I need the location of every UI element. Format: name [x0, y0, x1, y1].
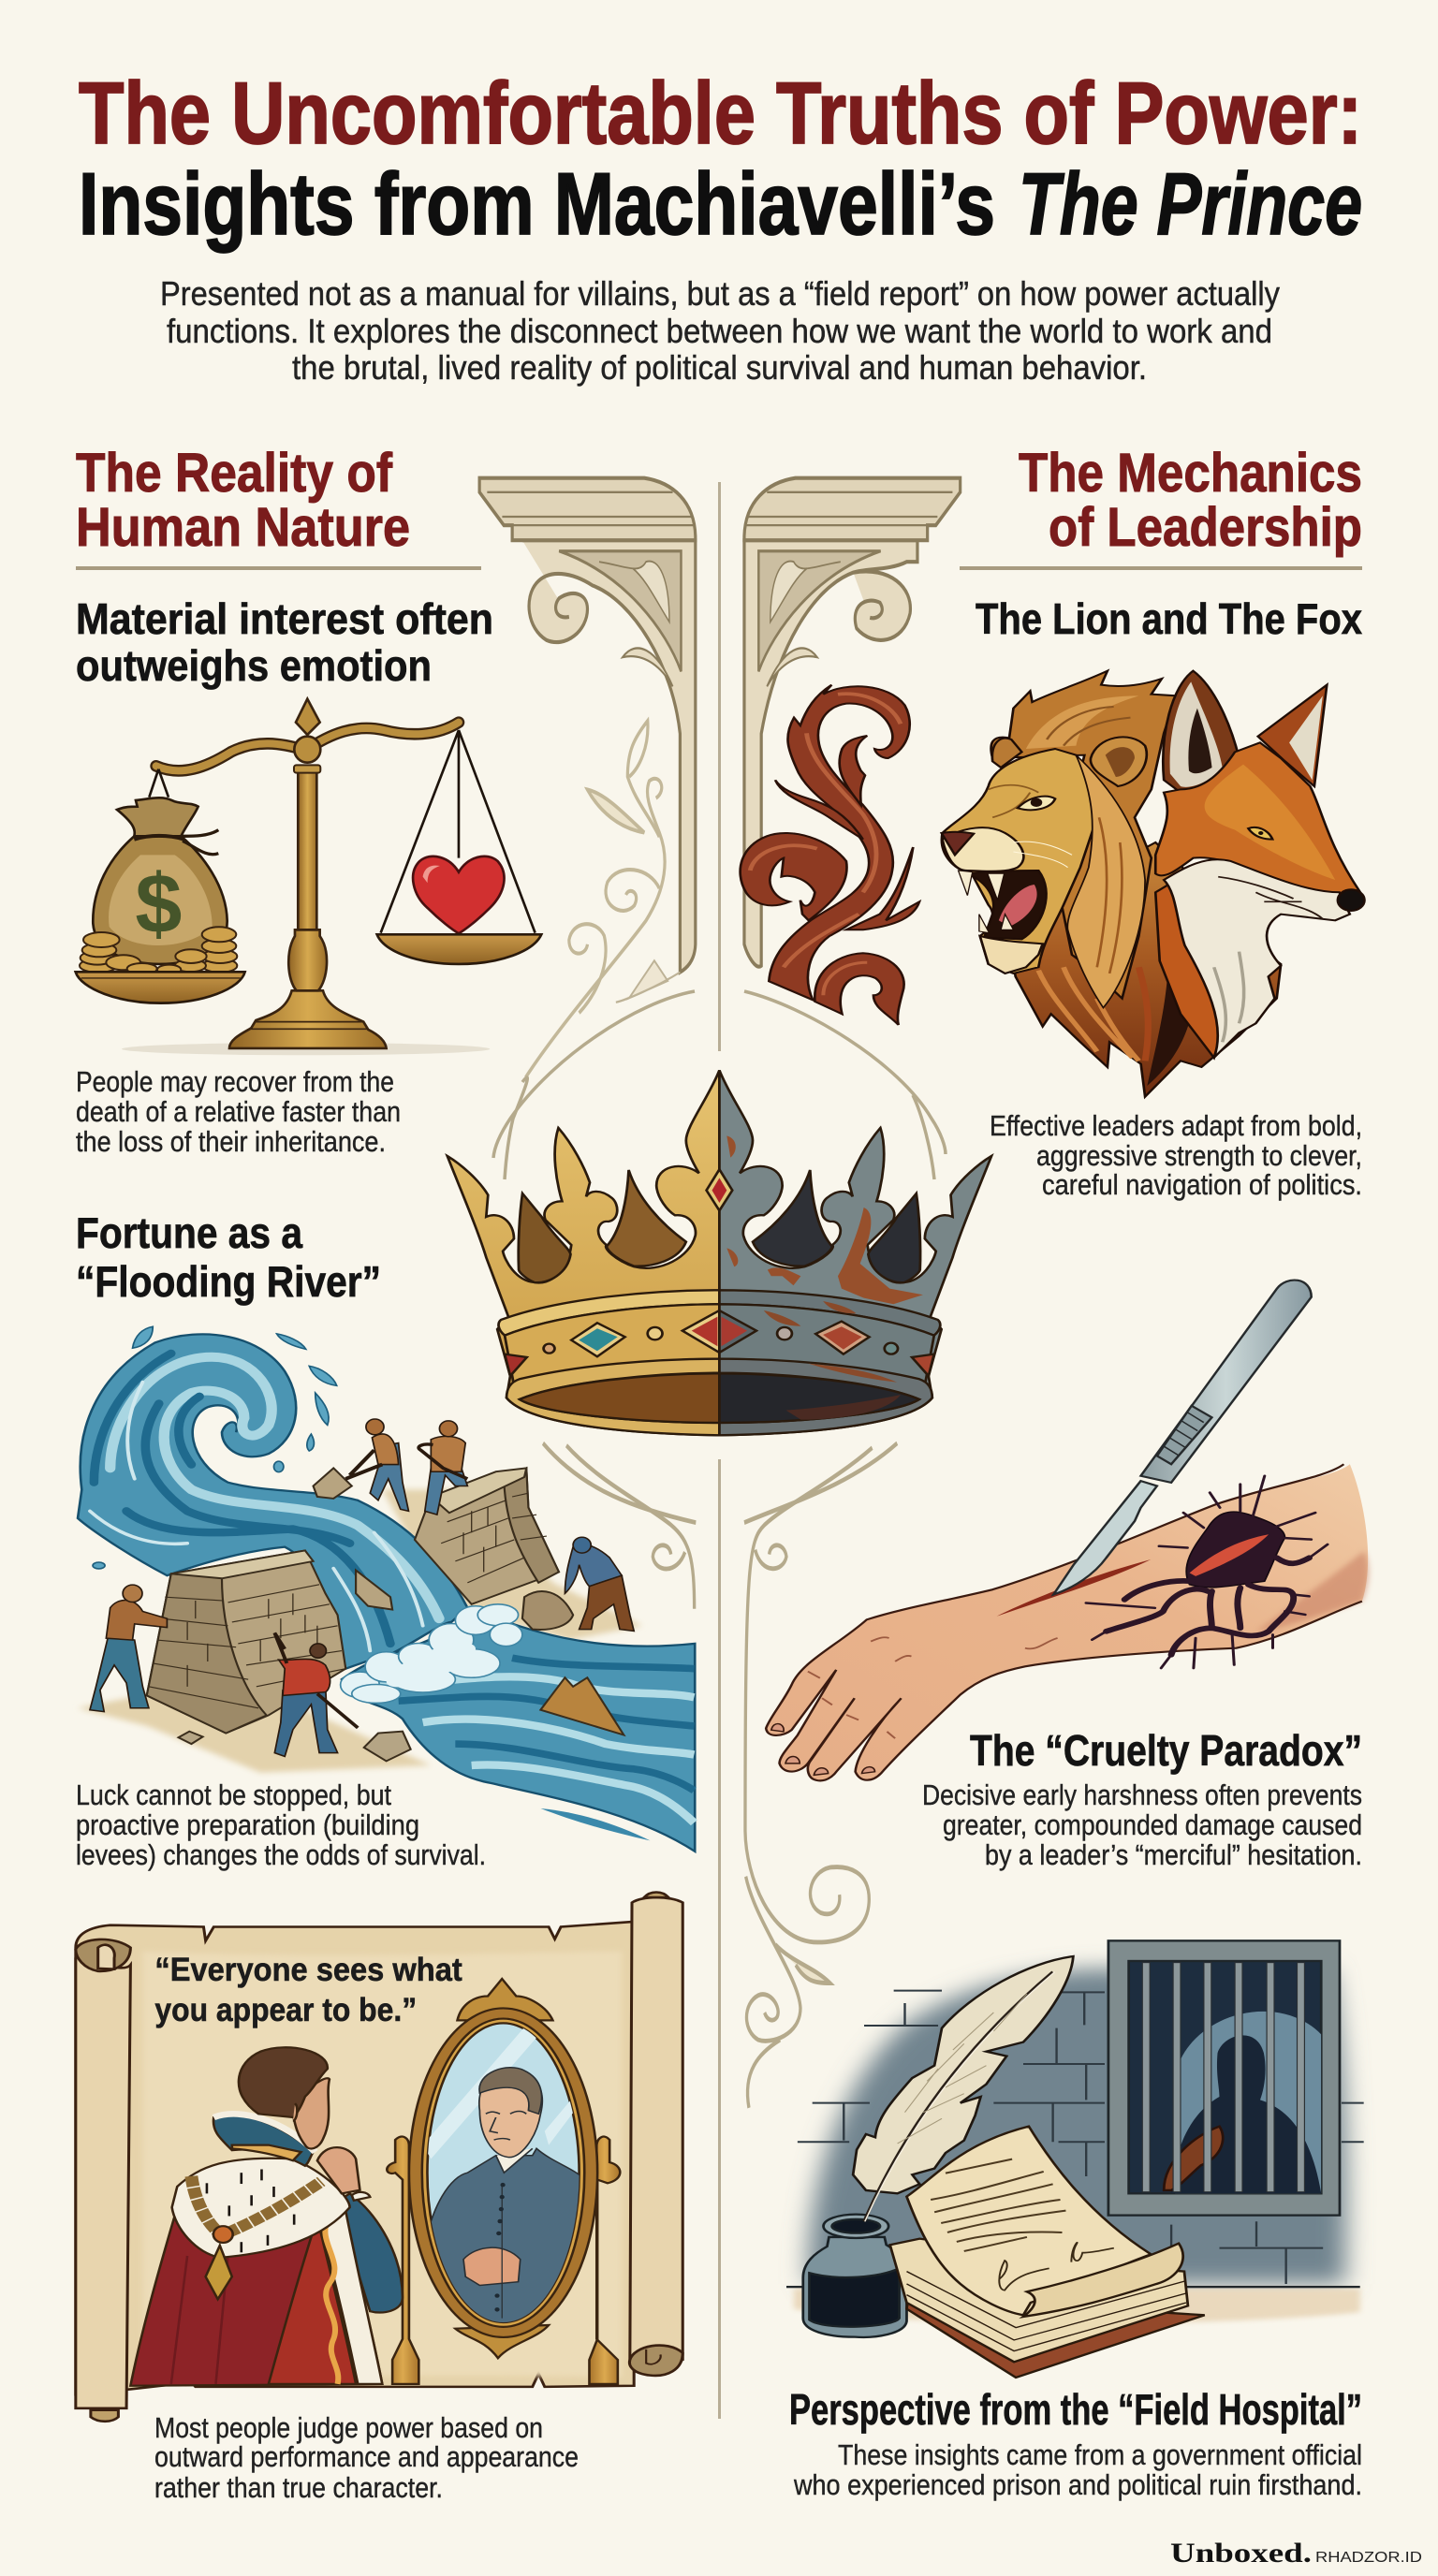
worker: right [565, 1537, 634, 1632]
text: government official [793, 2438, 1362, 2501]
heart [413, 856, 505, 933]
illustration: flooding river with workers and levees [78, 1326, 695, 1852]
watermark: RHADZOR.ID [1315, 2550, 1422, 2566]
ear [1091, 737, 1147, 786]
quote: you appear to be.” [154, 1992, 417, 2028]
text: judge power: outward performance and appearance [154, 2440, 579, 2473]
water [78, 1334, 695, 1852]
intro text: Presented not as a manual for villains, but as a “field report” on how power actually [160, 274, 1280, 313]
scalpel [1053, 1281, 1312, 1595]
text: luck cannot be stopped: Luck cannot be stopped, but [76, 1778, 391, 1811]
title: Insights from Machiavelli’s [79, 154, 995, 253]
money bag [93, 798, 227, 964]
ornamental bracket right [744, 478, 961, 967]
subheading: lion and fox: The Lion and The Fox [976, 594, 1362, 643]
intro text [160, 274, 1280, 387]
rocks [179, 1468, 624, 1761]
text: decisive harshness: by a leader’s “merciful” hesitation. [985, 1838, 1362, 1871]
subheading: material interest: outweighs emotion [76, 641, 432, 690]
lion top mane [991, 671, 1177, 999]
feather [853, 1956, 1073, 2221]
book [890, 2239, 1205, 2378]
quote: “Everyone sees what [154, 1952, 462, 1988]
crown [448, 1070, 991, 1435]
fox [1155, 880, 1223, 1058]
text: inheritance: death of a relative faster than [76, 1095, 401, 1128]
subheading: material interest: Material interest often [76, 594, 493, 643]
ink bottle [803, 2215, 906, 2337]
subheading: fortune as a flooding river [76, 1208, 381, 1306]
central divider lines [718, 482, 721, 2419]
lower ornaments [543, 1443, 897, 2108]
right levee [415, 1468, 559, 1604]
prison window [1108, 1940, 1340, 2216]
worker: top right [418, 1421, 467, 1515]
scroll parchment [76, 1922, 634, 2394]
dark lower mane [1014, 842, 1281, 1097]
left roll [76, 1939, 130, 2422]
subheading: cruelty paradox: The “Cruelty Paradox” [970, 1726, 1362, 1775]
text: judge power [154, 2411, 579, 2504]
text: judge power: rather than true character. [154, 2471, 443, 2504]
crown rusted half [719, 1070, 991, 1435]
icon: balance scale with money bag and heart [76, 699, 541, 1055]
text: leaders adapt: Effective leaders adapt from bold, [990, 1109, 1362, 1142]
wound [1086, 1476, 1328, 1668]
watermark: Unboxed. [1170, 2538, 1312, 2569]
worker: center red [274, 1632, 358, 1756]
text: inheritance: People may recover from the [76, 1065, 394, 1098]
heading: The Reality of Human Nature: Human Nature [76, 497, 410, 558]
intro text: functions. It explores the disconnect between how we want the world to work and [167, 312, 1272, 350]
paper [906, 2127, 1183, 2317]
heading: The Reality of Human Nature [76, 443, 481, 570]
drops [93, 1326, 337, 1569]
heading: The Reality of Human Nature: The Reality of [76, 443, 393, 504]
face [942, 749, 1096, 973]
intro text: the brutal, lived reality of political survival and human behavior. [292, 348, 1147, 387]
text: government official: These insights came from a government official [838, 2438, 1362, 2471]
text: decisive harshness: Decisive early harshness often prevents [922, 1778, 1362, 1811]
worker: left [90, 1585, 167, 1712]
subheading: fortune as a flooding river: Fortune as a [76, 1208, 302, 1257]
text: judge power: Most people judge power based on [154, 2411, 543, 2444]
quote [154, 1952, 462, 2028]
subheading: material interest [76, 594, 493, 690]
text: leaders adapt: aggressive strength to clever, [1036, 1139, 1362, 1172]
text: decisive harshness [922, 1778, 1362, 1871]
text: luck cannot be stopped: levees) changes the odds of survival. [76, 1838, 486, 1871]
foam [341, 1604, 522, 1703]
mirror [130, 1979, 620, 2386]
heading: The Mechanics of Leadership: of Leadership [1049, 497, 1362, 558]
arcs around crown [493, 991, 946, 1179]
left levee [147, 1550, 345, 1734]
crown gold half [448, 1070, 719, 1435]
coins [80, 927, 237, 974]
text: luck cannot be stopped: proactive preparation (building [76, 1808, 419, 1841]
text: inheritance: the loss of their inheritance. [76, 1125, 386, 1158]
subheading: fortune as a flooding river: “Flooding River” [76, 1257, 381, 1306]
text: inheritance [76, 1065, 401, 1158]
ornamental bracket left [479, 478, 696, 1077]
text: government official: who experienced prison and political ruin firsthand. [793, 2468, 1362, 2501]
text: leaders adapt: careful navigation of politics. [1042, 1168, 1362, 1201]
wall [786, 1969, 1364, 2323]
golden mane over face [1067, 755, 1145, 1008]
red flourish [741, 685, 919, 1025]
illustration: scalpel and wounded arm [766, 1281, 1369, 1780]
man [333, 2193, 403, 2313]
right roll [629, 1893, 682, 2376]
title [79, 64, 1362, 253]
money bag: $ [135, 858, 182, 952]
heading: The Mechanics of Leadership [960, 443, 1362, 570]
heading: The Mechanics of Leadership: The Mechanics [1019, 443, 1362, 504]
illustration: lion and fox head [942, 671, 1364, 1097]
text: decisive harshness: greater, compounded damage caused [943, 1808, 1362, 1841]
panel: scroll with prince and mirror [76, 1893, 682, 2422]
arm [766, 1464, 1369, 1780]
ground [78, 1489, 642, 1773]
illustration: quill, ink, book and prison window [786, 1940, 1364, 2378]
text: leaders adapt [990, 1109, 1362, 1201]
workers [90, 1419, 634, 1756]
text: luck cannot be stopped [76, 1778, 486, 1871]
worker: top left [345, 1419, 408, 1511]
vine [525, 721, 665, 1077]
watermark [1170, 2538, 1422, 2569]
